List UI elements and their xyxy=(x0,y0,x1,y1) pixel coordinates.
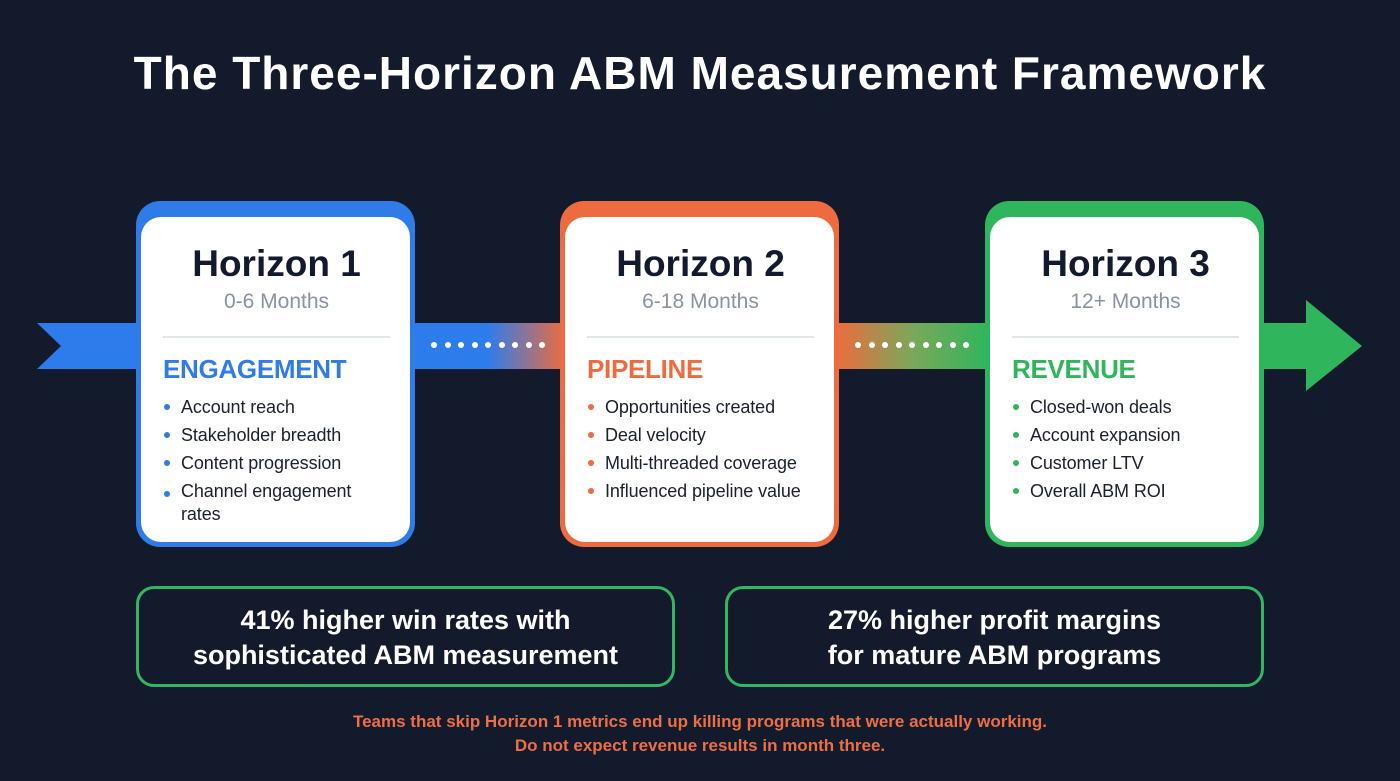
panel: horizon 1: Account reach xyxy=(181,397,295,417)
panel: horizon 2: PIPELINE xyxy=(587,354,703,384)
panel: horizon 1: Channel engagement rates xyxy=(181,481,351,524)
footer note: Teams that skip Horizon 1 metrics end up killing programs that were actually working. xyxy=(353,712,1047,731)
panel: horizon 3: Closed-won deals xyxy=(1030,397,1171,417)
panel: horizon 2 xyxy=(560,201,839,547)
panel: horizon 1: Content progression xyxy=(181,453,341,473)
panel: horizon 2: Horizon 2 xyxy=(616,243,785,284)
panel: horizon 1: Horizon 1 xyxy=(192,243,361,284)
stat callout 1: sophisticated ABM measurement xyxy=(193,640,618,670)
panel: horizon 2: Influenced pipeline value xyxy=(605,481,801,501)
connector dots 2 xyxy=(855,342,969,348)
title: The Three-Horizon ABM Measurement Framework xyxy=(134,47,1266,99)
footer note xyxy=(353,712,1047,755)
stat callout 1 xyxy=(136,586,675,687)
panel: horizon 1 xyxy=(136,201,415,547)
panel: horizon 1: 0-6 Months xyxy=(224,290,329,313)
panel: horizon 1: Stakeholder breadth xyxy=(181,425,341,445)
stat callout 2: 27% higher profit margins xyxy=(828,605,1161,635)
panel: horizon 3: Overall ABM ROI xyxy=(1030,481,1166,501)
panel: horizon 3: Customer LTV xyxy=(1030,453,1144,473)
panel: horizon 2: Opportunities created xyxy=(605,397,775,417)
footer note: Do not expect revenue results in month three. xyxy=(515,736,885,755)
panel: horizon 3 xyxy=(985,201,1264,547)
panel: horizon 3: Horizon 3 xyxy=(1041,243,1210,284)
connector dots 1 xyxy=(431,342,545,348)
panel: horizon 2: 6-18 Months xyxy=(642,290,759,313)
panel: horizon 2: Deal velocity xyxy=(605,425,706,445)
panel: horizon 3: 12+ Months xyxy=(1070,290,1181,313)
panel: horizon 2: Multi-threaded coverage xyxy=(605,453,797,473)
stat callout 1: 41% higher win rates with xyxy=(240,605,571,635)
panel: horizon 1: ENGAGEMENT xyxy=(163,354,346,384)
stat callout 2: for mature ABM programs xyxy=(828,640,1161,670)
panel: horizon 3: REVENUE xyxy=(1012,354,1136,384)
panel: horizon 3: Account expansion xyxy=(1030,425,1180,445)
stat callout 2 xyxy=(725,586,1264,687)
